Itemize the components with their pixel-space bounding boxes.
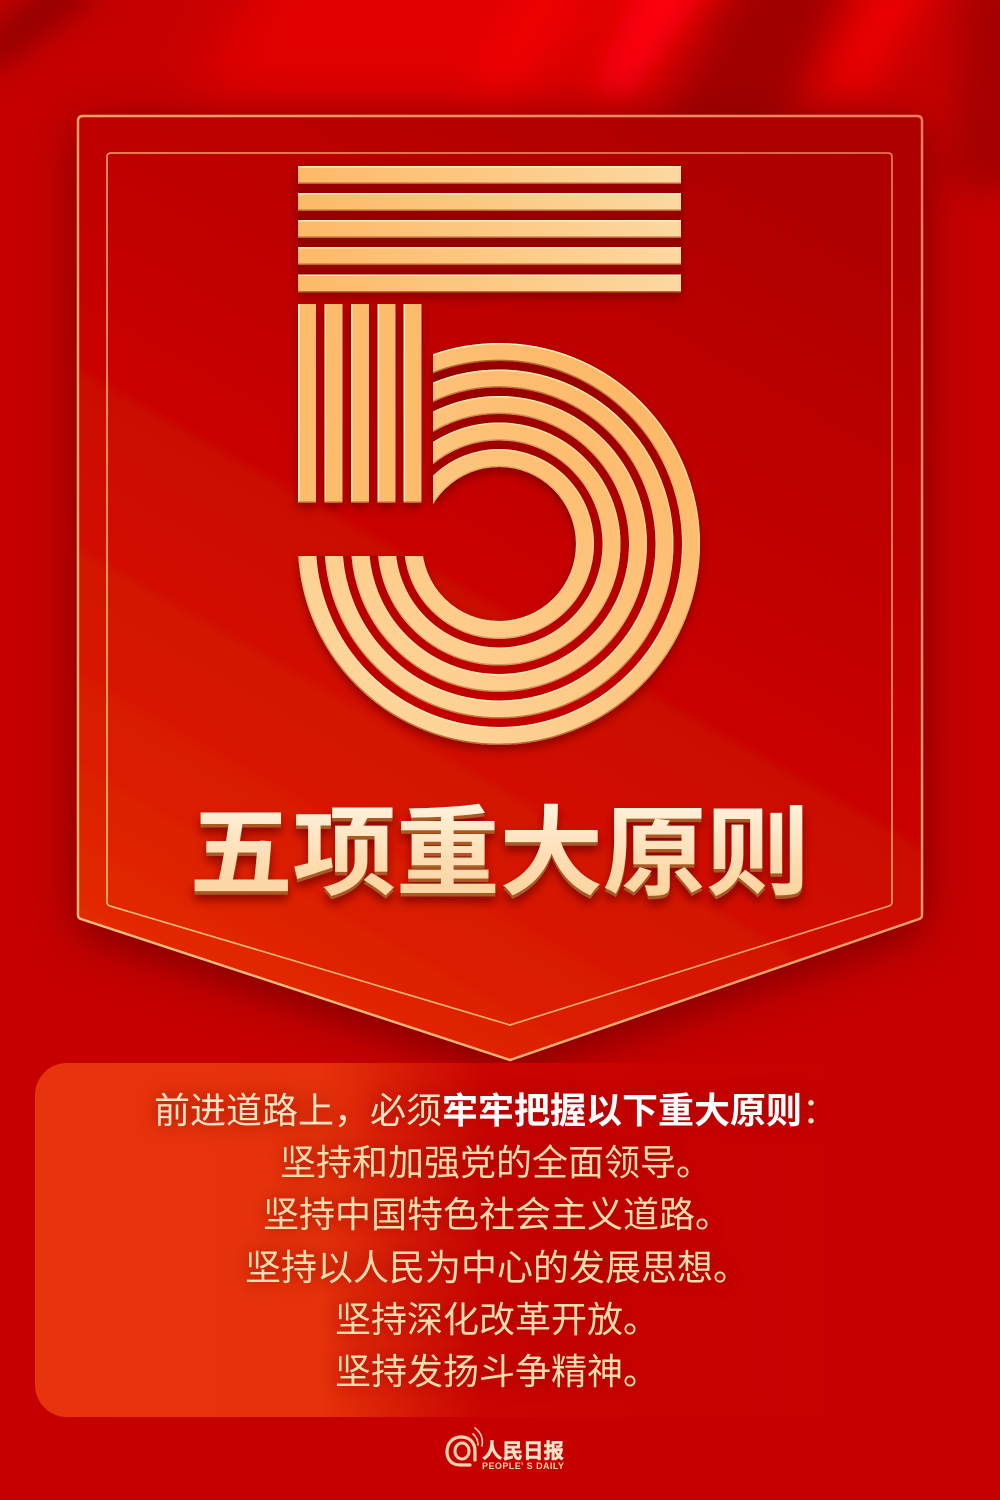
icon: at sign with signal waves	[447, 1428, 482, 1465]
principle 1: 坚持和加强党的全面领导。	[280, 1142, 712, 1183]
panel fill and outer border	[78, 116, 922, 1060]
five vertical bars	[298, 304, 422, 503]
text halo: 坚持深化改革开放。	[335, 1299, 659, 1340]
principle 5: 坚持发扬斗争精神。	[335, 1351, 659, 1392]
body text	[154, 1090, 838, 1392]
principle 3: 坚持以人民为中心的发展思想。	[245, 1247, 749, 1288]
shield panel	[78, 116, 922, 1060]
five horizontal bars	[298, 166, 681, 292]
text halo: 前进道路上，必须牢牢把握以下重大原则：	[154, 1090, 838, 1131]
logo: People's Daily	[447, 1428, 564, 1471]
inner border	[107, 153, 892, 1025]
text box background	[35, 1063, 915, 1417]
number 5	[298, 166, 699, 744]
text halo: 坚持发扬斗争精神。	[335, 1351, 659, 1392]
logo english name: PEOPLE' S DAILY	[482, 1461, 564, 1471]
logo chinese name: 人民日报	[482, 1440, 564, 1463]
text halo	[154, 1090, 838, 1392]
text halo: 坚持中国特色社会主义道路。	[263, 1194, 731, 1235]
principle 2: 坚持中国特色社会主义道路。	[263, 1194, 731, 1235]
intro line: 前进道路上，必须牢牢把握以下重大原则：	[154, 1090, 838, 1131]
red ribbon folds	[0, 0, 1000, 190]
principle 4: 坚持深化改革开放。	[335, 1299, 659, 1340]
concentric arcs	[299, 344, 699, 744]
text halo: 坚持以人民为中心的发展思想。	[245, 1247, 749, 1288]
title: 五项重大原则	[189, 800, 810, 908]
text halo: 坚持和加强党的全面领导。	[280, 1142, 712, 1183]
title: 五项重大原则	[189, 803, 810, 912]
